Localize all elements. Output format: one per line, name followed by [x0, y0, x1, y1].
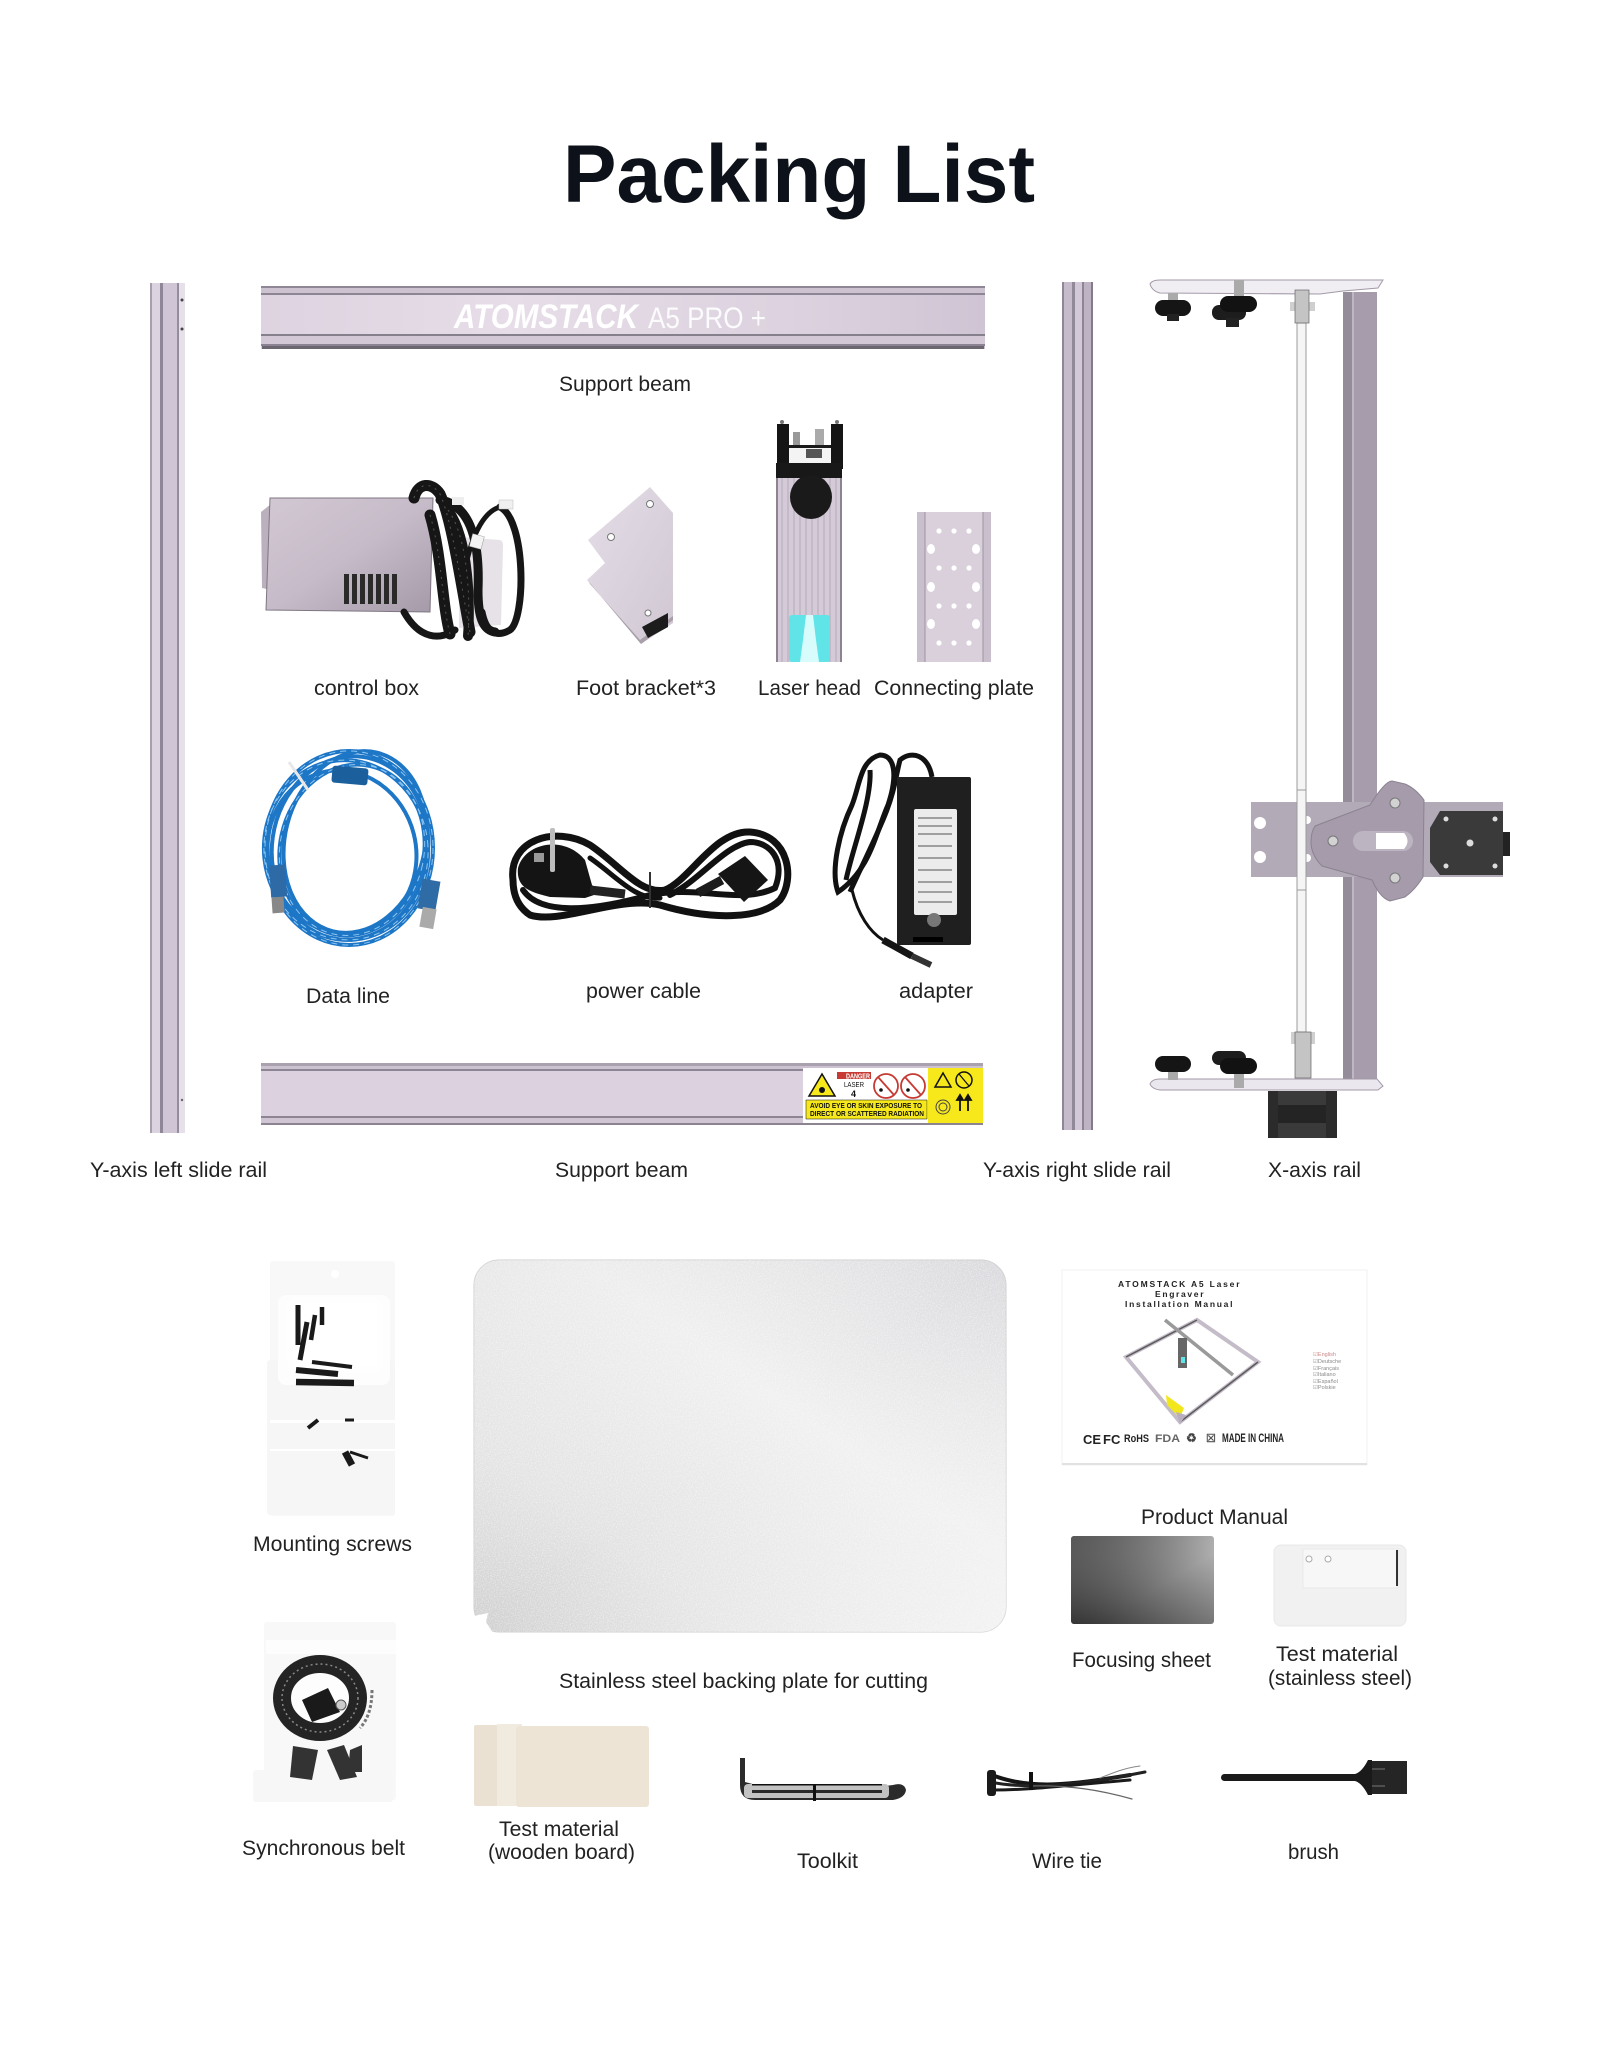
icon: screw bags [267, 1261, 395, 1516]
bottom motor [1268, 1091, 1337, 1138]
beam [1343, 292, 1377, 1081]
panel: frame parts [90, 280, 1510, 1182]
sticker: laser warning [803, 1068, 983, 1123]
top wheels and pulley [1168, 293, 1178, 302]
logo: ATOMSTACK A5 PRO +: A5 PRO + [648, 302, 766, 335]
icon: laser head [776, 420, 843, 662]
icon: manual booklet: MADE IN CHINA [1222, 1431, 1284, 1445]
item: mounting screws [253, 1261, 412, 1556]
label: Y-axis right slide rail: Y-axis right slide rail [983, 1159, 1171, 1182]
icon: manual booklet: Engraver [1155, 1289, 1205, 1299]
label: Y-axis left slide rail: Y-axis left slide rail [90, 1159, 267, 1182]
sticker: laser warning: AVOID EYE OR SKIN EXPOSURE TO [810, 1103, 923, 1110]
item: adapter [835, 755, 973, 1003]
icon: connecting plate [917, 512, 991, 662]
item: stainless steel backing plate [474, 1260, 1006, 1693]
top plate [1150, 280, 1383, 294]
item: toolkit [740, 1758, 906, 1873]
label: laser head: Laser head [758, 677, 861, 700]
sticker: laser warning: DANGER [846, 1074, 870, 1080]
item: wire tie [987, 1766, 1145, 1873]
carriage plate [1251, 802, 1503, 877]
item: X-axis rail [1150, 280, 1510, 1182]
icon: wooden boards [474, 1724, 649, 1807]
icon: manual booklet: ☑Polskie [1313, 1384, 1336, 1391]
item: focusing sheet [1071, 1536, 1214, 1672]
panel: accessories [242, 1260, 1412, 1873]
label: synchronous belt: Synchronous belt [242, 1837, 405, 1860]
label: adapter: adapter [899, 980, 973, 1003]
label: focusing sheet: Focusing sheet [1072, 1649, 1211, 1672]
icon: power adapter [835, 755, 971, 965]
icon: manual booklet: FDA [1155, 1433, 1180, 1445]
right motor [1430, 811, 1503, 875]
icon: left slide rail [150, 283, 185, 1133]
icon: black power cable [513, 828, 788, 917]
sticker: laser warning: LASER [844, 1082, 864, 1089]
label: toolkit: Toolkit [797, 1850, 858, 1873]
icon: X-axis rail assembly [1150, 280, 1510, 1138]
mini engraver [1126, 1320, 1258, 1424]
label: power cable: power cable [586, 980, 701, 1003]
icon: foot bracket [587, 487, 673, 644]
item: brush [1221, 1760, 1407, 1864]
item: test material wooden board [474, 1724, 649, 1864]
logo: ATOMSTACK A5 PRO +: ATOMSTACK [453, 298, 640, 336]
item: synchronous belt [242, 1622, 405, 1860]
icon: manual booklet [1062, 1270, 1367, 1465]
label: data line: Data line [306, 985, 390, 1008]
item: power cable [513, 828, 788, 1003]
item: test material stainless steel [1268, 1545, 1412, 1690]
icon: manual booklet: Installation Manual [1125, 1299, 1234, 1309]
label: connecting plate: Connecting plate [874, 677, 1034, 700]
icon: stainless test pieces [1274, 1545, 1406, 1626]
title: Packing List [563, 129, 1035, 220]
icon: manual booklet: CE [1083, 1432, 1101, 1447]
icon: hex key tool [740, 1758, 906, 1801]
icon: blue USB cable [250, 736, 445, 950]
item: Y-axis left slide rail [90, 283, 267, 1182]
label: mounting screws: Mounting screws [253, 1533, 412, 1556]
icon: manual booklet: FC [1103, 1432, 1121, 1447]
bottom plate [1150, 1079, 1383, 1090]
item: Y-axis right slide rail [983, 282, 1171, 1182]
label: stainless steel line: (stainless steel) [1268, 1667, 1412, 1690]
logo: ATOMSTACK A5 PRO + [453, 298, 766, 336]
icon: manual booklet: ☑Español [1313, 1378, 1338, 1385]
label: top support beam: Support beam [559, 373, 691, 396]
rod [1297, 323, 1306, 1032]
label: test material wooden: Test material [499, 1818, 619, 1841]
icon: cable ties [987, 1766, 1145, 1799]
icon: support beam with warning sticker [261, 1063, 983, 1125]
icon: manual booklet: ☑Deutsche [1313, 1358, 1341, 1365]
item: bottom support beam [261, 1063, 983, 1182]
icon: manual booklet: ☑Français [1313, 1365, 1339, 1372]
icon: right slide rail [1062, 282, 1093, 1130]
triangular plate [1311, 781, 1424, 901]
icon: focusing sheet [1071, 1536, 1214, 1624]
label: test material stainless steel: Test material [1276, 1643, 1398, 1666]
icon: manual booklet: ATOMSTACK A5 Laser [1118, 1279, 1241, 1289]
icon: manual booklet: ☑Italiano [1313, 1371, 1336, 1378]
icon: manual booklet: RoHS [1124, 1433, 1149, 1445]
icon: control box with braided cables [261, 485, 521, 636]
label: wire tie: Wire tie [1032, 1850, 1102, 1873]
label: foot bracket: Foot bracket*3 [576, 677, 716, 700]
item: laser head [758, 420, 861, 700]
item: control box [261, 485, 521, 700]
sticker: laser warning: DIRECT OR SCATTERED RADIATION [810, 1111, 924, 1118]
icon: manual booklet: ☑English [1313, 1351, 1336, 1358]
icon: backing plate [474, 1260, 1006, 1633]
label: bottom support beam: Support beam [555, 1159, 688, 1182]
item: product manual [1062, 1270, 1367, 1529]
label: control box: control box [314, 677, 420, 700]
icon: support beam with logo [261, 286, 985, 349]
icon: manual booklet: ☒ [1206, 1433, 1216, 1445]
label: product manual: Product Manual [1141, 1506, 1288, 1529]
label: backing plate: Stainless steel backing plate for cutting [559, 1670, 928, 1693]
label: brush: brush [1288, 1841, 1339, 1864]
icon: belt in bag [253, 1622, 396, 1802]
icon: brush [1221, 1760, 1407, 1795]
item: foot bracket [576, 487, 716, 700]
item: top support beam [261, 286, 985, 396]
item: connecting plate [874, 512, 1034, 700]
icon: manual booklet: ♻ [1186, 1431, 1197, 1445]
label: wooden board line: (wooden board) [488, 1841, 635, 1864]
sticker: laser warning: 4 [851, 1089, 856, 1099]
item: data line [250, 736, 445, 1008]
bottom wheels and pulley [1167, 1056, 1179, 1064]
label: X-axis rail: X-axis rail [1268, 1159, 1361, 1182]
